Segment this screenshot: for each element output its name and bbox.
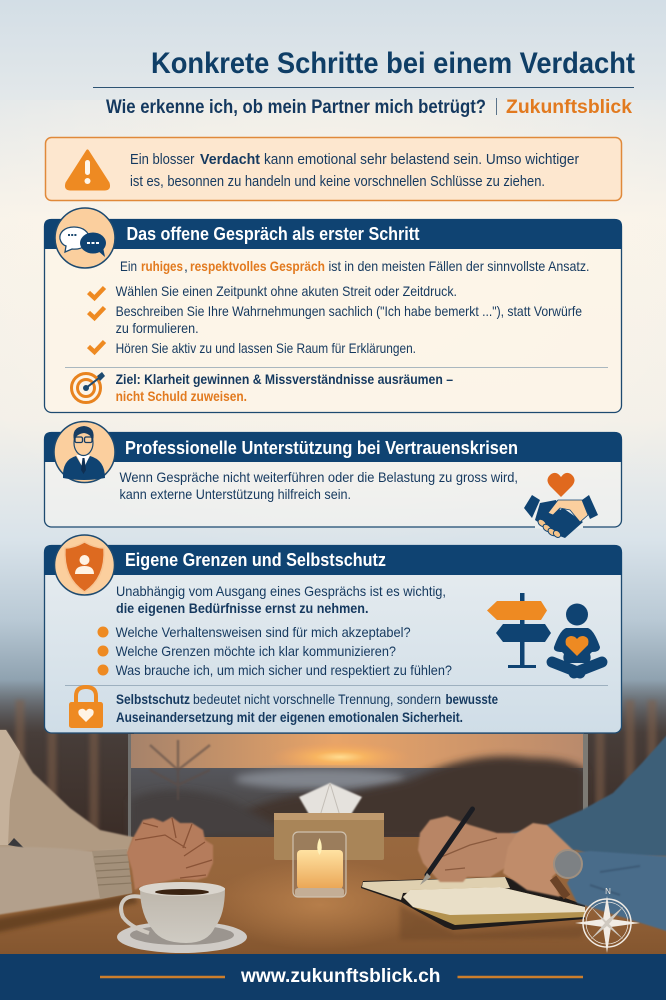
compass emblem xyxy=(575,887,640,953)
icon: check xyxy=(88,308,104,318)
subtitle: Wie erkenne ich, ob mein Partner mich betrügt? xyxy=(106,97,486,118)
candle in glass xyxy=(293,832,346,897)
title rule xyxy=(93,87,634,88)
panel header bar xyxy=(44,432,622,462)
checklist: Beschreiben Sie Ihre Wahrnehmungen sachlich ("Ich habe bemerkt ..."), statt Vorwürfe xyxy=(116,303,582,319)
hand writing with pen xyxy=(418,809,519,885)
goal statement: Ziel: Klarheit gewinnen & Missverständnisse ausräumen – xyxy=(116,372,453,387)
closing statement: bewusste xyxy=(446,692,498,707)
panel heading: Eigene Grenzen und Selbstschutz xyxy=(125,549,386,570)
intro text xyxy=(116,583,446,616)
intro sentence: ruhiges xyxy=(141,258,183,274)
footer band xyxy=(0,954,666,1000)
icon: signpost xyxy=(487,593,551,668)
checklist: Wählen Sie einen Zeitpunkt ohne akuten Streit oder Zeitdruck. xyxy=(116,283,457,299)
icon: speech bubbles xyxy=(55,208,115,268)
closing statement: Auseinandersetzung mit der eigenen emotionalen Sicherheit. xyxy=(116,710,463,725)
compass emblem: N xyxy=(605,887,611,896)
panel: Das offene Gespräch xyxy=(44,208,622,412)
bullet xyxy=(98,646,108,656)
panel header bar xyxy=(44,219,622,249)
alert text: kann emotional sehr belastend sein. Umso wichtiger xyxy=(264,152,579,168)
panel heading: Professionelle Unterstützung bei Vertrauenskrisen xyxy=(125,437,518,458)
panel header bar xyxy=(44,545,622,575)
curtains xyxy=(0,680,666,845)
intro text: Unabhängig vom Ausgang eines Gesprächs ist es wichtig, xyxy=(116,583,446,599)
left person: sweater arm xyxy=(0,730,133,916)
wooden table xyxy=(0,837,666,954)
window view with sunset xyxy=(128,734,588,840)
question list: Was brauche ich, um mich sicher und respektiert zu fühlen? xyxy=(116,662,452,678)
tissue box xyxy=(274,783,384,860)
body text: Wenn Gespräche nicht weiterführen oder die Belastung zu gross wird, xyxy=(120,469,518,485)
panel: Professionelle Unterstützung xyxy=(44,422,622,539)
icon: warning triangle xyxy=(66,151,109,189)
checklist: Hören Sie aktiv zu und lassen Sie Raum für Erklärungen. xyxy=(116,340,416,356)
question list: Welche Grenzen möchte ich klar kommunizieren? xyxy=(116,643,396,659)
body text: kann externe Unterstützung hilfreich sein. xyxy=(120,486,351,502)
intro sentence: Ein xyxy=(120,258,137,274)
intro sentence: ist in den meisten Fällen der sinnvollste Ansatz. xyxy=(328,258,590,274)
icon: check xyxy=(88,288,104,298)
bullet xyxy=(98,626,108,638)
question list xyxy=(98,624,452,678)
icon: padlock with heart xyxy=(69,687,103,728)
bullet xyxy=(98,664,108,676)
icon: handshake with heart xyxy=(524,473,598,539)
question list: Welche Verhaltensweisen sind für mich akzeptabel? xyxy=(116,624,411,640)
clasped hands xyxy=(127,817,213,890)
coffee cup on saucer xyxy=(117,882,247,953)
closing statement xyxy=(116,692,498,725)
panel: Eigene Grenzen xyxy=(44,535,622,733)
alert text: ist es, besonnen zu handeln und keine vorschnellen Schlüsse zu ziehen. xyxy=(130,174,545,190)
second hand and wristwatch xyxy=(503,823,582,897)
icon: counsellor portrait xyxy=(54,422,115,482)
icon: target xyxy=(72,372,105,402)
goal statement: nicht Schuld zuweisen. xyxy=(116,389,247,404)
right person: denim shirt xyxy=(510,725,666,934)
intro text: die eigenen Bedürfnisse ernst zu nehmen. xyxy=(116,600,368,616)
icon: seated person with heart xyxy=(552,604,602,673)
subtitle: Zukunftsblick xyxy=(506,97,632,118)
goal statement xyxy=(116,372,453,404)
panel heading: Das offene Gespräch als erster Schritt xyxy=(126,223,420,244)
alert text xyxy=(130,152,579,190)
photo: table scene xyxy=(0,680,666,954)
closing statement: Selbstschutz xyxy=(116,692,190,707)
alert text: Ein blosser xyxy=(130,152,195,168)
body text xyxy=(120,469,518,502)
checklist xyxy=(88,283,582,356)
alert text: Verdacht xyxy=(200,152,260,168)
intro sentence: , xyxy=(184,258,188,274)
footer url: www.zukunftsblick.ch xyxy=(240,966,440,987)
checklist: zu formulieren. xyxy=(116,320,199,336)
closing statement: bedeutet nicht vorschnelle Trennung, sondern xyxy=(193,692,441,707)
intro sentence: respektvolles Gespräch xyxy=(190,258,325,274)
icon: check xyxy=(88,342,104,352)
open notebook xyxy=(361,877,585,930)
alert box xyxy=(46,138,622,200)
icon: shield with person xyxy=(54,535,114,595)
intro sentence xyxy=(120,258,590,274)
